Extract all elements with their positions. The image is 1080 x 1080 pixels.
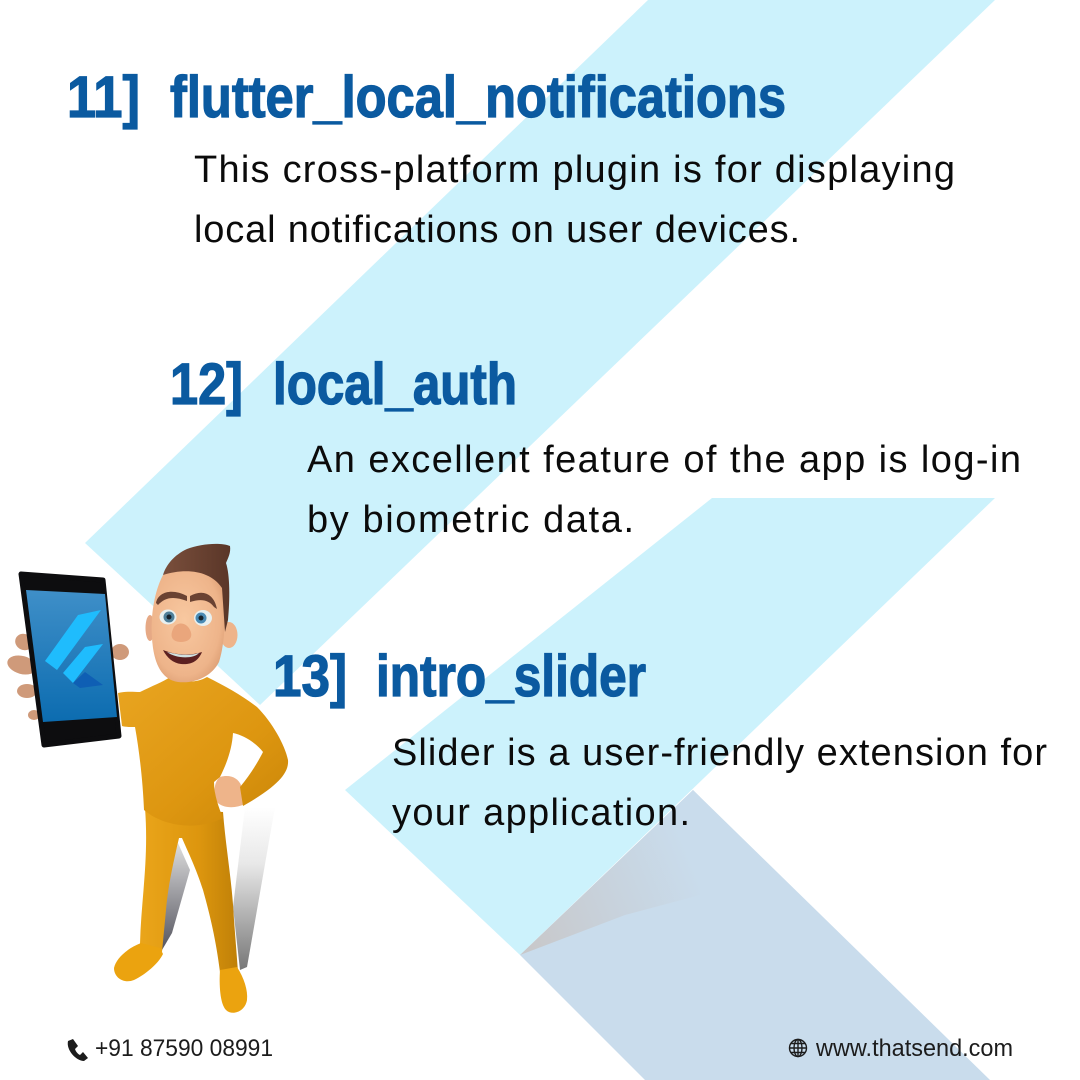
text: item 11 description: local notifications on user devices. <box>194 209 800 251</box>
hand on hip <box>215 776 245 807</box>
text: item 12 description: by biometric data. <box>307 499 634 541</box>
footer: website: www.thatsend.com <box>815 1035 1013 1062</box>
illustration: cartoon man holding phone <box>5 544 288 1013</box>
heading: item 11: 11] <box>67 65 140 130</box>
heading: item 13: 13] <box>273 644 347 709</box>
nose <box>172 624 191 642</box>
text: item 12 description: An excellent feature of the app is log-in <box>307 439 1021 481</box>
legs and shoes <box>114 808 247 1013</box>
eyes <box>160 610 212 626</box>
torso and arm <box>118 677 288 826</box>
text: item 13 description <box>392 732 1047 834</box>
text: item 11 description <box>194 149 955 251</box>
eyebrows <box>156 592 187 605</box>
mouth <box>163 650 202 664</box>
flutter logo on phone <box>45 610 103 688</box>
hair <box>163 544 230 632</box>
heading: item 13 <box>273 644 646 709</box>
heading: item 11: flutter_local_notifications <box>170 65 786 130</box>
background: dark-blue fold band <box>520 790 990 1080</box>
head <box>146 544 238 682</box>
icon: globe <box>790 1040 806 1056</box>
fingers behind phone <box>5 631 129 720</box>
heading: item 12 <box>170 352 517 417</box>
background: lower light-blue chevron <box>345 498 995 955</box>
phone <box>21 574 119 745</box>
icon: phone <box>68 1039 88 1061</box>
text: item 13 description: your application. <box>392 792 690 834</box>
text: item 13 description: Slider is a user-friendly extension for <box>392 732 1047 774</box>
heading: item 13: intro_slider <box>376 644 646 709</box>
leg shadows <box>150 807 275 970</box>
background: upper light-blue chevron <box>85 0 995 705</box>
heading: item 12: local_auth <box>273 352 517 417</box>
heading: item 12: 12] <box>170 352 243 417</box>
footer: phone number: +91 87590 08991 <box>95 1035 273 1062</box>
text: item 11 description: This cross-platform plugin is for displaying <box>194 149 955 191</box>
text: item 12 description <box>307 439 1021 541</box>
